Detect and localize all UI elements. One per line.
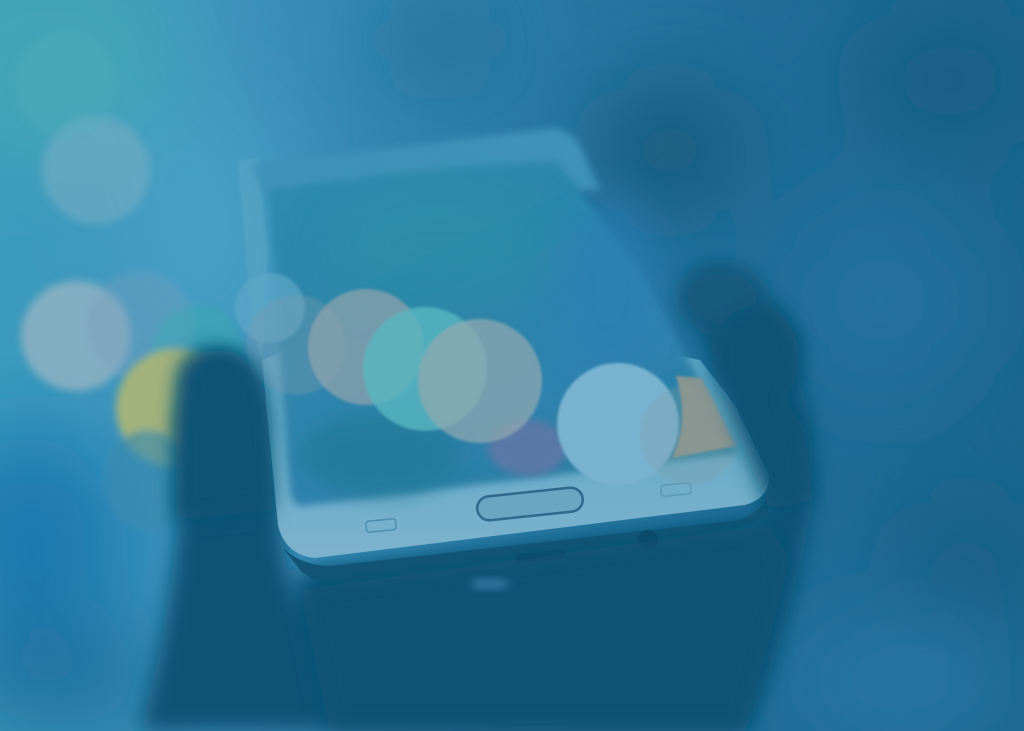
bokeh lights: left side	[13, 33, 243, 530]
phone screen	[268, 160, 738, 506]
phone top blurred edge	[250, 128, 600, 195]
left finger over bokeh	[176, 351, 272, 520]
screen blue glow	[565, 200, 655, 370]
screen teal glow	[330, 185, 550, 305]
back key	[366, 518, 397, 533]
phone underside	[283, 490, 770, 586]
bottom port	[515, 549, 565, 564]
phone bezel	[262, 300, 769, 558]
home button	[476, 487, 584, 521]
right fingertips	[680, 266, 812, 510]
screen purple glow	[488, 420, 568, 476]
bokeh lights: over phone	[235, 273, 740, 485]
screen lower teal	[300, 415, 460, 495]
lower hand shadow	[300, 525, 790, 731]
headphone jack	[638, 530, 658, 550]
hand: fingers and palm	[140, 268, 812, 731]
phone side edge highlight	[238, 158, 268, 360]
menu key	[661, 482, 692, 497]
phone body	[238, 128, 770, 586]
small light under phone	[470, 578, 510, 590]
